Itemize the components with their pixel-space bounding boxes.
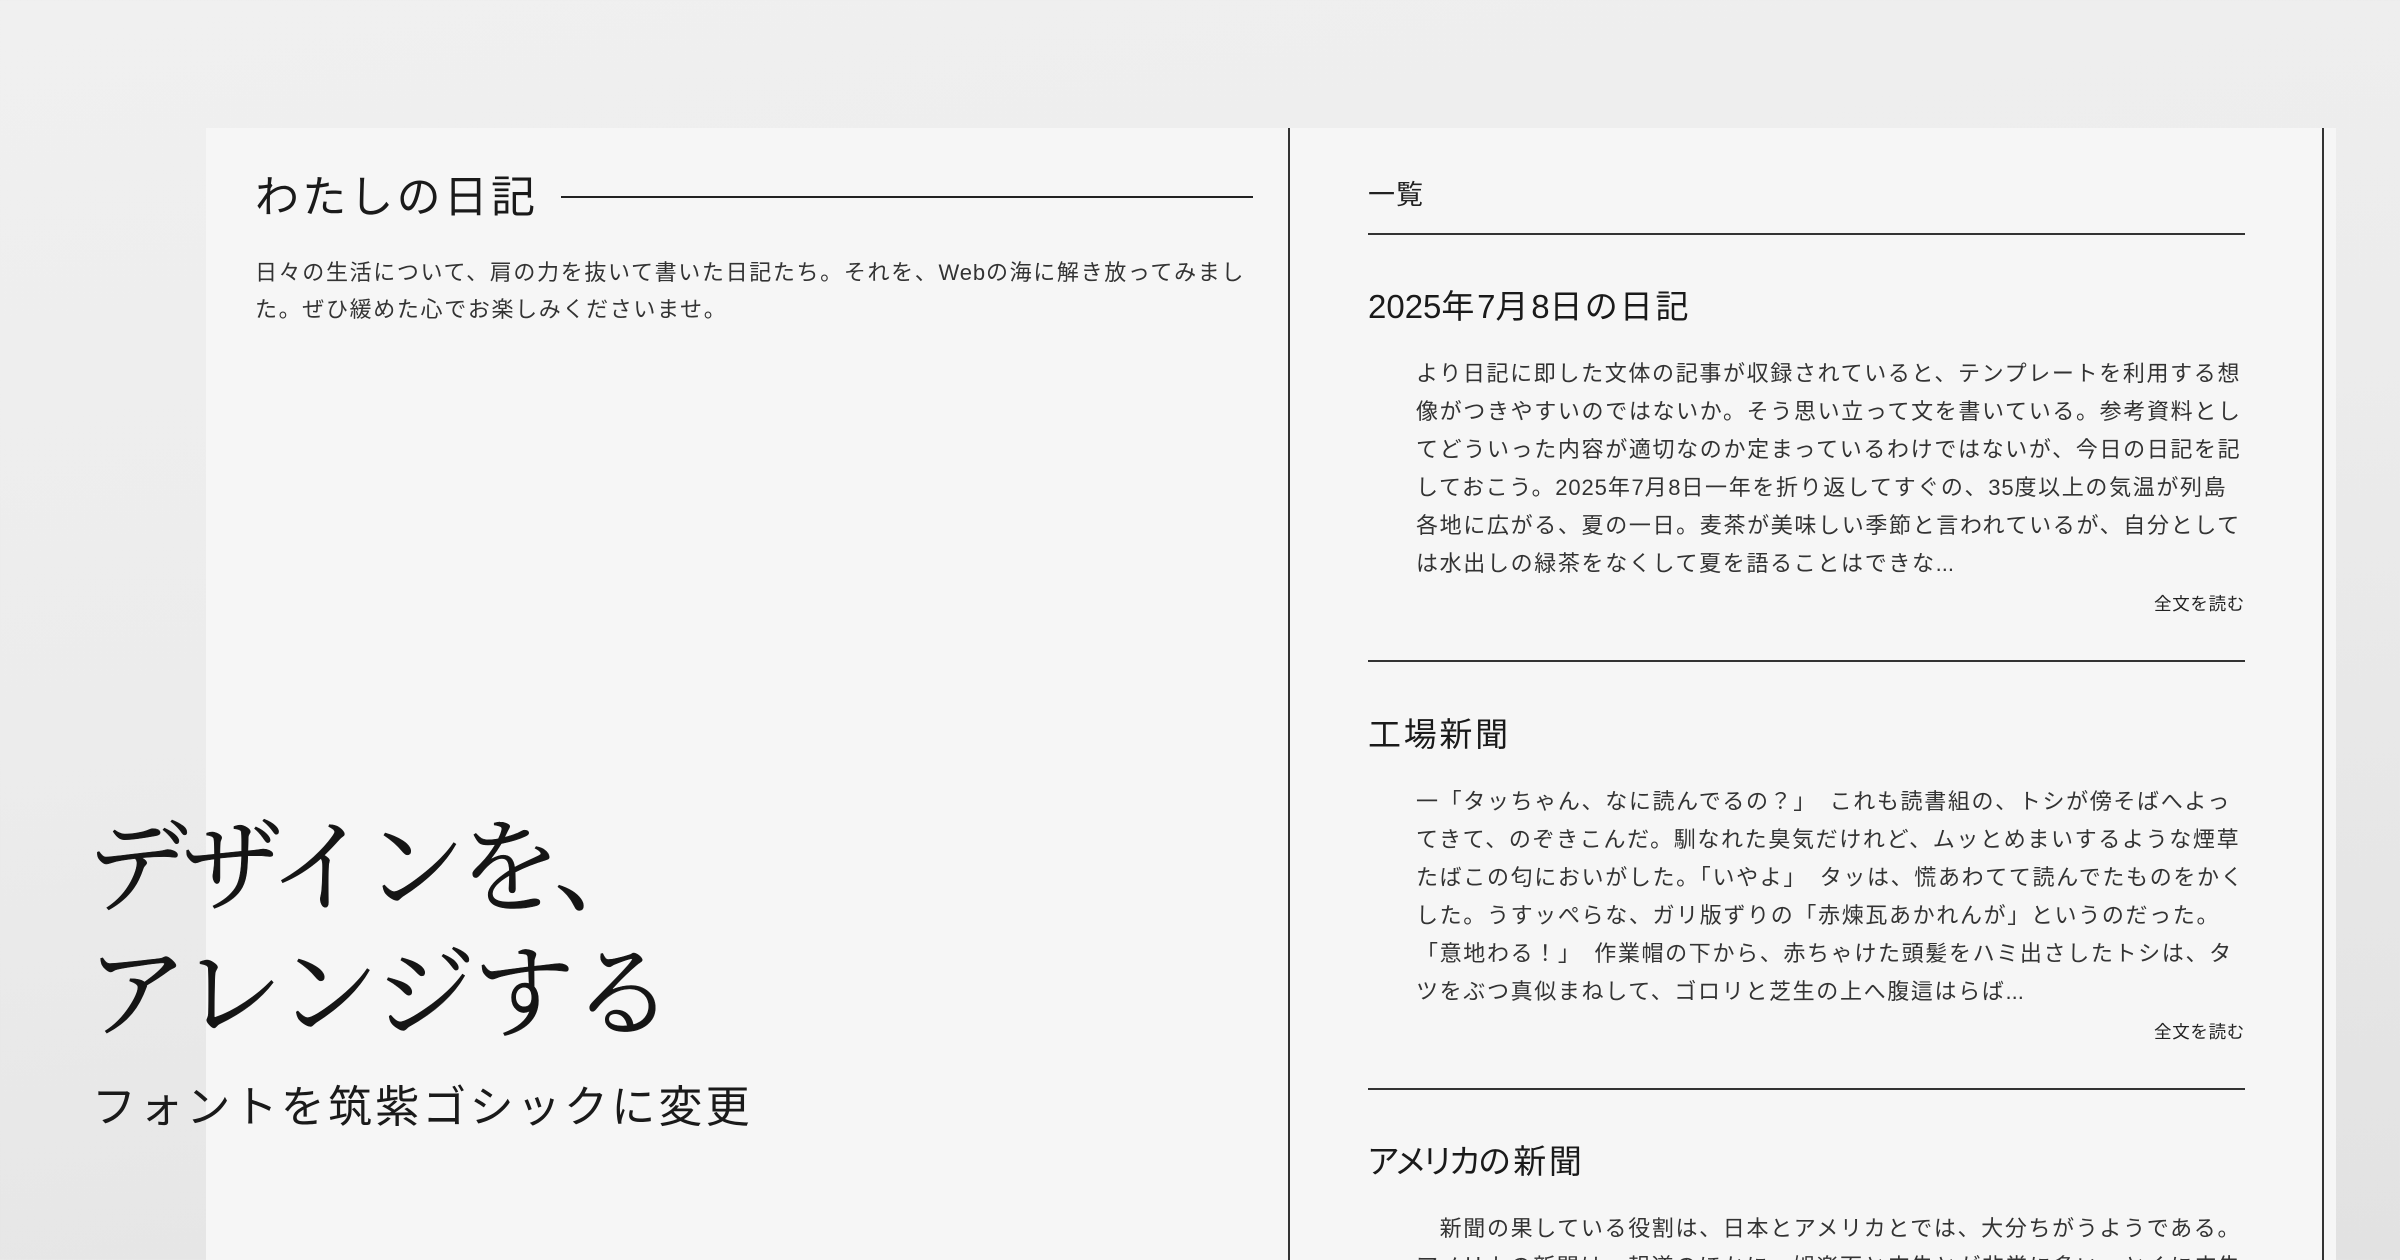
hero subtitle: フォントを筑紫ゴシックに変更 <box>92 1083 753 1132</box>
intro text: た。ぜひ緩めた心でお楽しみくださいませ。 <box>255 297 727 322</box>
article 2 body <box>1416 788 2244 1004</box>
article 3 title: アメリカの新聞 <box>1368 1142 1585 1180</box>
article 1 body <box>1416 361 2242 576</box>
article 1 body: 像がつきやすいのではないか。そう思い立って文を書いている。参考資料とし <box>1416 399 2242 424</box>
article 2 title: 工場新聞 <box>1368 716 1511 752</box>
article 1 body: 各地に広がる、夏の一日。麦茶が美味しい季節と言われているが、自分として <box>1416 513 2241 538</box>
article 2 rule <box>1368 1088 2245 1090</box>
article 2 body: 一「タッちゃん、なに読んでるの？」 これも読書組の、トシが傍そばへよっ <box>1416 788 2231 814</box>
list heading rule <box>1368 232 2245 234</box>
panel: main page sheet <box>206 128 2336 1260</box>
column divider right <box>2322 128 2324 1260</box>
article 2 body: たばこの匂においがした。「いやよ」 タッは、慌あわてて読んでたものをかく <box>1416 864 2244 890</box>
heading rule <box>561 196 1253 198</box>
intro text: 日々の生活について、肩の力を抜いて書いた日記たち。それを、Webの海に解き放ってみまし <box>255 260 1245 285</box>
article 2 read more link: 全文を読む <box>2154 1022 2245 1042</box>
column divider left <box>1288 128 1290 1260</box>
article 2 body: ツをぶつ真似まねして、ゴロリと芝生の上へ腹這はらば... <box>1416 978 2024 1004</box>
article 2 body: てきて、のぞきこんだ。馴なれた臭気だけれど、ムッとめまいするような煙草 <box>1416 826 2240 852</box>
article 2 body: 「意地わる！」 作業帽の下から、赤ちゃけた頭髪をハミ出さしたトシは、タ <box>1416 940 2233 966</box>
article 1 read more link: 全文を読む <box>2154 594 2245 614</box>
article 1 body: てどういった内容が適切なのか定まっているわけではないが、今日の日記を記 <box>1416 437 2241 462</box>
article 1 body: しておこう。2025年7月8日一年を折り返してすぐの、35度以上の気温が列島 <box>1416 475 2227 500</box>
article 1 title: 2025年7月8日の日記 <box>1368 288 1691 325</box>
heading: わたしの日記: わたしの日記 <box>255 173 538 222</box>
hero title: アレンジする <box>86 939 671 1052</box>
hero title: デザインを、 <box>86 813 649 926</box>
intro text <box>255 260 1245 322</box>
list heading: 一覧 <box>1368 180 1424 210</box>
article 1 body: より日記に即した文体の記事が収録されていると、テンプレートを利用する想 <box>1416 361 2241 386</box>
article 2 body: した。うすッぺらな、ガリ版ずりの「赤煉瓦あかれんが」というのだった。 <box>1416 902 2220 928</box>
article 3 body <box>1416 1216 2241 1260</box>
article 1 rule <box>1368 660 2245 662</box>
hero title <box>86 813 671 1052</box>
article 1 body: は水出しの緑茶をなくして夏を語ることはできな... <box>1416 551 1954 576</box>
article 3 body: 新聞の果している役割は、日本とアメリカとでは、大分ちがうようである。 <box>1440 1216 2241 1240</box>
